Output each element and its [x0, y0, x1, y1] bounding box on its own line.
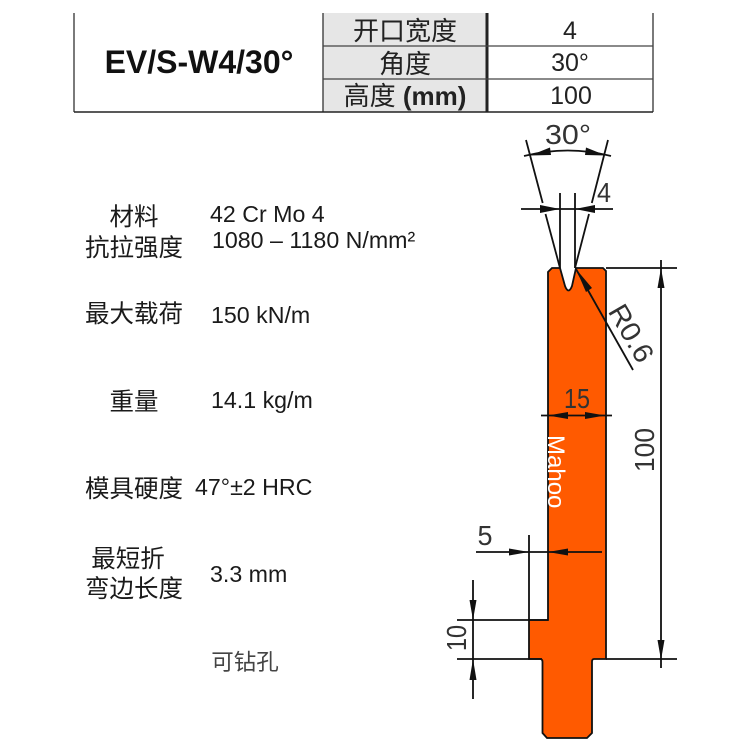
spec: minimum flange length: 3.3 mm	[210, 561, 287, 587]
dimension: width 15: 15	[564, 383, 590, 414]
spec: minimum flange length: 弯边长度	[85, 575, 183, 603]
header cells background	[323, 13, 487, 112]
spec table	[74, 13, 653, 112]
row: angle: 30°	[551, 49, 589, 77]
dimension: opening width 4	[521, 177, 613, 268]
watermark: Mahoo	[542, 435, 569, 508]
spec: max load: 150 kN/m	[211, 302, 310, 328]
spec: hardness: 47°±2 HRC	[195, 474, 312, 500]
dimension: height 100	[606, 260, 677, 668]
spec: hardness	[85, 474, 312, 503]
spec: max load: 最大载荷	[85, 300, 183, 328]
spec: weight: 重量	[110, 388, 158, 416]
spec: material and tensile strength: 1080 – 1180 N/mm²	[212, 227, 415, 253]
dimension: height 100: 100	[629, 428, 660, 472]
model name: EV/S-W4/30°	[105, 44, 293, 80]
spec: weight: 14.1 kg/m	[211, 387, 313, 413]
spec: drillable: 可钻孔	[211, 650, 279, 675]
dimension: opening width 4: 4	[597, 177, 611, 208]
dimension: radius R0.6: R0.6	[602, 299, 660, 368]
spec: material and tensile strength	[85, 201, 415, 262]
row: height: 高度 (mm)	[344, 81, 466, 111]
dimension: width 15	[541, 383, 612, 419]
spec: minimum flange length	[85, 545, 287, 603]
dimension: thickness 5: 5	[478, 520, 492, 551]
dimension: radius R0.6	[576, 269, 660, 370]
spec: material and tensile strength: 抗拉强度	[85, 234, 183, 262]
row: height	[344, 81, 592, 111]
die profile	[529, 268, 606, 738]
row: opening width: 开口宽度	[353, 16, 457, 46]
spec: material and tensile strength: 材料	[110, 203, 158, 231]
dimension: height 10	[441, 580, 548, 699]
row: opening width: 4	[563, 17, 577, 45]
spec: material and tensile strength: 42 Cr Mo 4	[210, 201, 325, 227]
dimension: height 10: 10	[441, 625, 472, 651]
dimension: 30 degree angle	[524, 119, 611, 268]
row: height: 100	[550, 82, 592, 110]
dimension: 30 degree angle: 30°	[545, 119, 591, 150]
row: opening width	[353, 16, 577, 46]
dimension: thickness 5	[476, 520, 602, 620]
spec: weight	[110, 387, 313, 416]
spec: hardness: 模具硬度	[85, 475, 183, 503]
spec: max load	[85, 300, 310, 328]
die notch and outline	[529, 267, 606, 738]
row: angle	[379, 49, 589, 79]
row: angle: 角度	[379, 49, 431, 79]
spec: minimum flange length: 最短折	[91, 545, 165, 573]
